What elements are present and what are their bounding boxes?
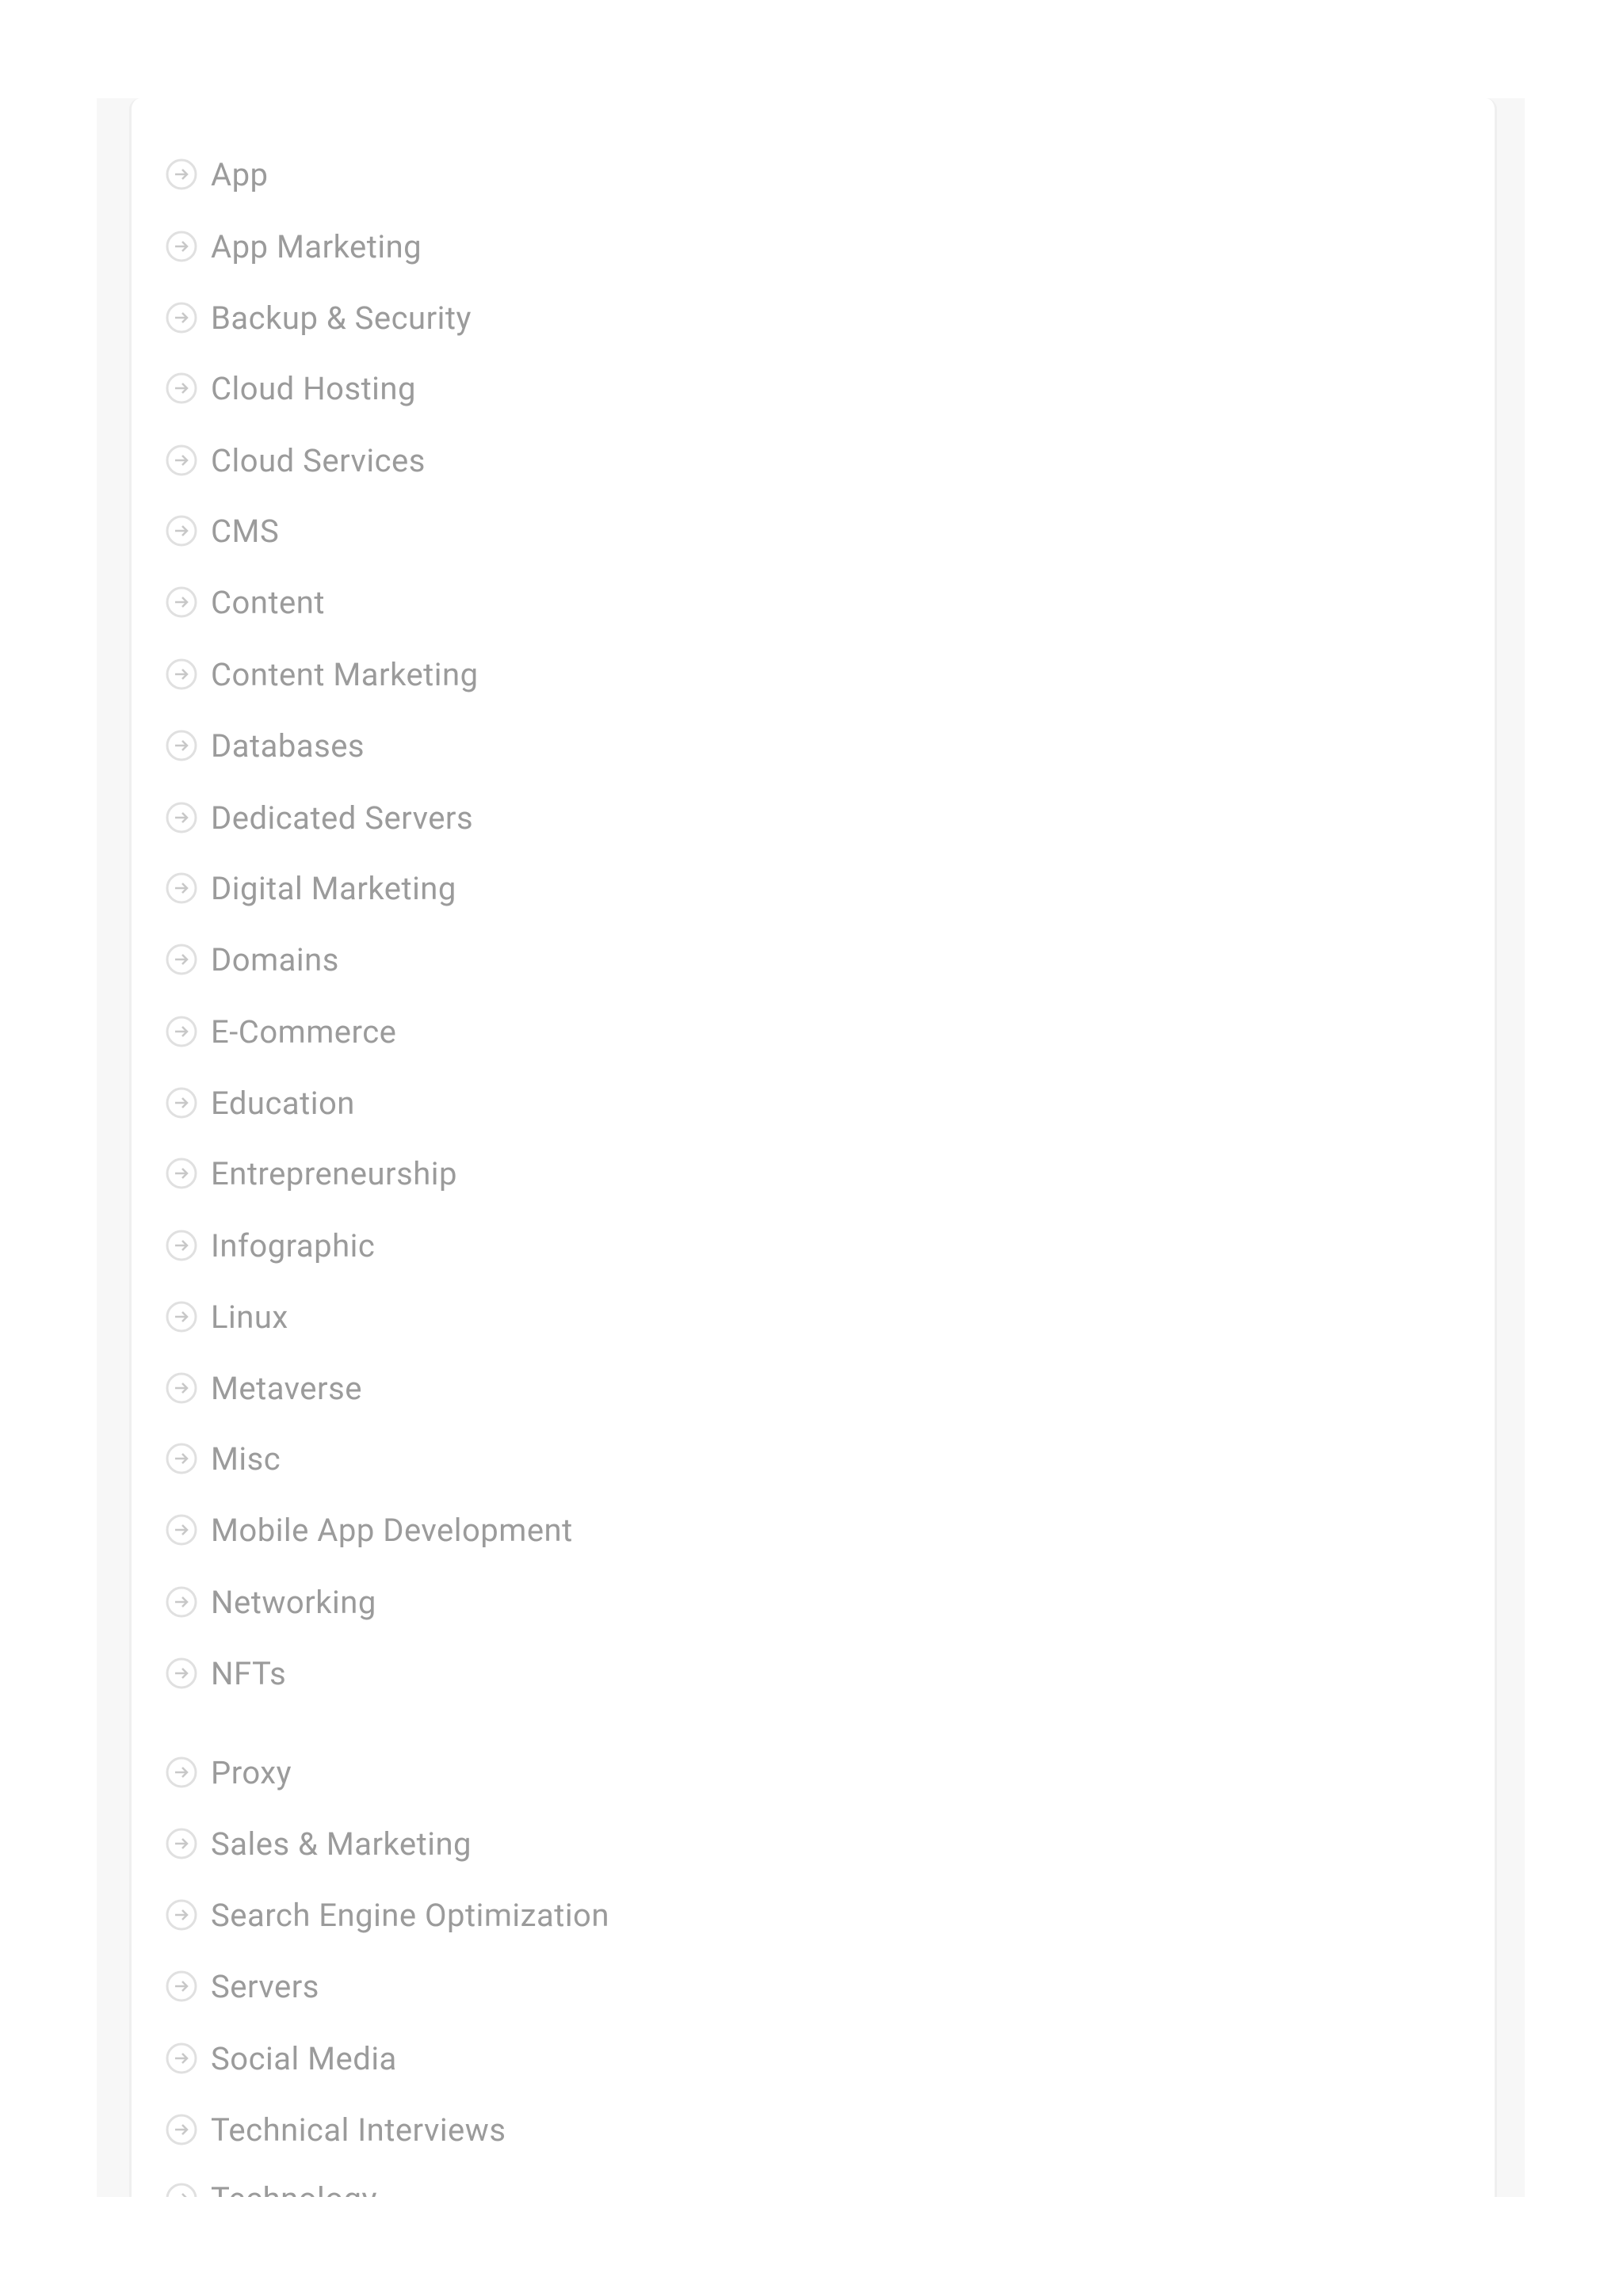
item: E-Commerce: E-Commerce	[211, 1013, 396, 1051]
item: App	[166, 155, 269, 193]
item: Cloud Services: Cloud Services	[211, 442, 426, 479]
item: Infographic: Infographic	[211, 1226, 375, 1264]
item: Mobile App Development: Mobile App Development	[211, 1512, 573, 1548]
item: Digital Marketing: Digital Marketing	[211, 870, 456, 906]
item: Proxy	[166, 1754, 292, 1791]
item: Linux: Linux	[211, 1298, 288, 1336]
item: Databases: Databases	[211, 727, 365, 764]
item: Domains: Domains	[211, 941, 339, 978]
item: NFTs: NFTs	[211, 1654, 286, 1692]
item: Proxy: Proxy	[211, 1754, 292, 1791]
item: App Marketing: App Marketing	[211, 228, 422, 265]
item: CMS	[166, 512, 279, 550]
item: Servers: Servers	[211, 1968, 319, 2004]
panel: category card	[129, 98, 1497, 2253]
item: Content Marketing: Content Marketing	[211, 656, 479, 692]
item: Backup & Security: Backup & Security	[211, 299, 472, 336]
item: Misc: Misc	[211, 1440, 281, 1477]
item: Metaverse: Metaverse	[211, 1369, 362, 1407]
item: Search Engine Optimization: Search Engine Optimization	[211, 1897, 609, 1933]
item: Networking: Networking	[211, 1583, 376, 1621]
item: App: App	[211, 155, 269, 193]
item: Entrepreneurship: Entrepreneurship	[211, 1155, 457, 1192]
item: CMS: CMS	[211, 512, 279, 550]
item: NFTs	[166, 1654, 286, 1692]
item: Content: Content	[211, 583, 325, 621]
item: Linux	[166, 1298, 288, 1336]
item: Misc	[166, 1440, 281, 1477]
item: Education: Education	[211, 1084, 355, 1122]
item: Social Media: Social Media	[211, 2039, 397, 2077]
item: Sales & Marketing: Sales & Marketing	[211, 1825, 472, 1862]
item: Technical Interviews: Technical Interviews	[211, 2111, 506, 2149]
item: Cloud Hosting: Cloud Hosting	[211, 369, 416, 407]
item: Dedicated Servers: Dedicated Servers	[211, 799, 473, 837]
